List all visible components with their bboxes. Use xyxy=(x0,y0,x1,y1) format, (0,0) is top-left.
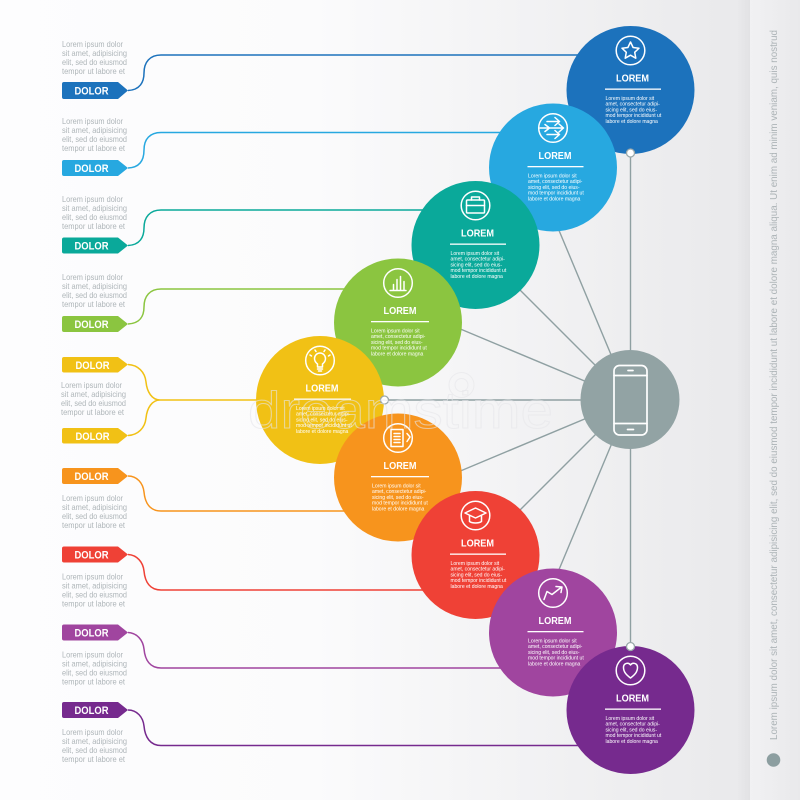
item 8 left label: elit, sed do eiusmod xyxy=(62,668,127,678)
circle 4: green: Lorem ipsum dolor sit xyxy=(371,328,420,334)
circle 1: dark blue: sicing elit, sed do eius- xyxy=(606,107,657,113)
item 6 left label: tempor ut labore et xyxy=(62,521,126,530)
icon: trend arrow xyxy=(539,579,567,607)
circle 8: light purple: amet, consectetur adipi- xyxy=(528,644,583,650)
circle 5: yellow: Lorem ipsum dolor sit xyxy=(296,406,345,412)
item 2 left label: elit, sed do eiusmod xyxy=(62,135,127,144)
circle 7: red: Lorem ipsum dolor sit xyxy=(450,561,500,567)
circle 4: green: sicing elit, sed do eius- xyxy=(371,340,423,346)
circle 7: red: sicing elit, sed do eius- xyxy=(450,572,502,578)
item 9 left label: Lorem ipsum dolor xyxy=(62,728,123,737)
connector 5 (double) xyxy=(128,364,280,436)
circle 3: teal: amet, consectetur adipi- xyxy=(450,257,505,263)
item 3 left label: sit amet, adipisicing xyxy=(62,204,127,213)
item 6 left label: DOLOR xyxy=(74,471,109,483)
circle 2: light blue: Lorem ipsum dolor sit xyxy=(528,173,577,179)
item 1 left label: tempor ut labore et xyxy=(62,67,126,76)
item 2 left label: Lorem ipsum dolor xyxy=(62,117,123,126)
item 2 left label: DOLOR xyxy=(74,163,109,175)
connector 3 xyxy=(128,210,440,246)
icon: smartphone xyxy=(614,366,647,435)
circle 8: light purple xyxy=(489,568,617,696)
item 3 left label: DOLOR xyxy=(74,240,109,252)
item 1 left label xyxy=(62,40,128,99)
watermark: dreamstime xyxy=(248,382,553,440)
item 2 left label: sit amet, adipisicing xyxy=(62,126,127,135)
circle 1: dark blue: mod tempor incididunt ut xyxy=(606,113,662,119)
circle 5: yellow: labore et dolore magna xyxy=(296,429,349,435)
circle 2: light blue: LOREM xyxy=(538,150,572,162)
connector 9 xyxy=(128,710,600,746)
connector 6 xyxy=(128,476,360,511)
item 5 left label: tempor ut labore et xyxy=(61,408,125,417)
circle 4: green: mod tempor incididunt ut xyxy=(371,346,427,352)
circle 3: teal: Lorem ipsum dolor sit xyxy=(450,251,500,257)
icon: arrows xyxy=(539,114,567,142)
item 9 left label: elit, sed do eiusmod xyxy=(62,746,127,755)
item 9 left label: DOLOR xyxy=(74,705,109,717)
item 7 left label: elit, sed do eiusmod xyxy=(62,590,127,600)
circle 3: teal: sicing elit, sed do eius- xyxy=(450,262,502,268)
item 9 left label xyxy=(62,702,128,764)
icon: document xyxy=(384,424,412,452)
item 2 left label: tempor ut labore et xyxy=(62,144,126,153)
connector 1 xyxy=(128,55,600,90)
item 7 left label: Lorem ipsum dolor xyxy=(62,572,123,582)
icon: light bulb xyxy=(306,346,334,375)
circle 7: red: LOREM xyxy=(461,538,494,550)
side panel dot xyxy=(767,753,780,767)
circle 3: teal: labore et dolore magna xyxy=(450,274,503,280)
circle 8: light purple: mod tempor incididunt ut xyxy=(528,656,584,662)
circle 2: light blue: amet, consectetur adipi- xyxy=(528,179,583,185)
circle 6: orange: amet, consectetur adipi- xyxy=(372,489,427,495)
item 5 left label xyxy=(61,357,128,444)
circle 1: dark blue: LOREM xyxy=(616,72,649,84)
item 2 left label xyxy=(62,117,128,176)
item 6 left label: elit, sed do eiusmod xyxy=(62,512,127,521)
circle 5: yellow xyxy=(256,336,384,464)
circle 9: dark purple: LOREM xyxy=(616,692,649,704)
connector node: top xyxy=(626,149,634,157)
circle 2: light blue: mod tempor incididunt ut xyxy=(528,191,584,197)
item 1 left label: sit amet, adipisicing xyxy=(62,49,127,58)
circle 6: orange xyxy=(334,414,462,542)
circle 8: light purple: sicing elit, sed do eius- xyxy=(528,650,580,656)
circle 4: green: labore et dolore magna xyxy=(371,352,424,358)
connector 2 xyxy=(128,132,520,168)
circle 5: yellow: mod tempor incididunt ut xyxy=(296,423,352,429)
side panel xyxy=(750,0,800,800)
item 4 left label: tempor ut labore et xyxy=(62,300,126,309)
item 7 left label xyxy=(62,546,128,608)
circle 9: dark purple: Lorem ipsum dolor sit xyxy=(606,716,655,722)
circle 2: light blue xyxy=(489,104,617,232)
circle 5: yellow: sicing elit, sed do eius- xyxy=(296,417,348,423)
item 4 left label: Lorem ipsum dolor xyxy=(62,273,123,282)
circle 3: teal: LOREM xyxy=(461,228,494,240)
circle 1: dark blue: Lorem ipsum dolor sit xyxy=(606,96,655,102)
item 5 left label: Lorem ipsum dolor xyxy=(61,381,122,390)
item 4 left label: DOLOR xyxy=(74,319,109,331)
connector 8 xyxy=(128,632,520,668)
circle 4: green: amet, consectetur adipi- xyxy=(371,334,426,340)
item 5 left label: elit, sed do eiusmod xyxy=(61,399,126,408)
icon: briefcase xyxy=(461,191,490,220)
circle 1: dark blue xyxy=(566,26,694,154)
circle 2: light blue: sicing elit, sed do eius- xyxy=(528,185,580,191)
circle 7: red: mod tempor incididunt ut xyxy=(450,578,507,584)
circle 9: dark purple: amet, consectetur adipi- xyxy=(606,722,660,728)
icon: heart xyxy=(616,656,645,685)
item 3 left label xyxy=(62,195,128,254)
item 9 left label: sit amet, adipisicing xyxy=(62,737,127,746)
item 8 left label: DOLOR xyxy=(74,628,109,640)
item 1 left label: elit, sed do eiusmod xyxy=(62,58,127,67)
item 1 left label: DOLOR xyxy=(74,86,109,98)
circle 9: dark purple: labore et dolore magna xyxy=(606,739,658,745)
circle 6: orange: labore et dolore magna xyxy=(372,506,425,512)
circle 6: orange: LOREM xyxy=(384,460,417,472)
circle 3: teal: mod tempor incididunt ut xyxy=(450,268,507,274)
circle 4: green xyxy=(334,258,462,386)
item 7 left label: sit amet, adipisicing xyxy=(62,582,127,590)
item 3 left label: Lorem ipsum dolor xyxy=(62,195,123,204)
connector node: bottom xyxy=(626,642,634,650)
circle 6: orange: mod tempor incididunt ut xyxy=(372,501,428,507)
circle 6: orange: sicing elit, sed do eius- xyxy=(372,495,424,501)
icon: graduation cap xyxy=(461,501,490,530)
connector 4 xyxy=(128,289,360,324)
circle 5: yellow: amet, consectetur adipi- xyxy=(296,412,351,418)
item 7 left label: DOLOR xyxy=(74,550,109,562)
hub spokes xyxy=(384,153,630,646)
item 6 left label: Lorem ipsum dolor xyxy=(62,494,123,503)
item 8 left label xyxy=(62,624,128,686)
circle 1: dark blue: labore et dolore magna xyxy=(606,119,658,125)
connector node: middle xyxy=(380,396,388,404)
item 3 left label: elit, sed do eiusmod xyxy=(62,213,127,222)
item 1 left label: Lorem ipsum dolor xyxy=(62,40,123,49)
circle 7: red xyxy=(412,491,540,619)
item 3 left label: tempor ut labore et xyxy=(62,222,126,231)
circle 6: orange: Lorem ipsum dolor sit xyxy=(372,483,421,489)
circle 8: light purple: LOREM xyxy=(538,615,572,627)
item 4 left label: elit, sed do eiusmod xyxy=(62,291,127,300)
circle 9: dark purple: sicing elit, sed do eius- xyxy=(606,727,657,733)
item 4 left label: sit amet, adipisicing xyxy=(62,282,127,291)
item 5 left label: DOLOR xyxy=(76,431,110,443)
item 8 left label: sit amet, adipisicing xyxy=(62,660,127,668)
item 5 left label: DOLOR xyxy=(76,360,110,372)
side panel vertical text: Lorem ipsum dolor sit amet, consectetur adipisicing elit, sed do eiusmod tempor incididunt ut labore et dolore magna aliqua. Ut enim ad minim veniam, quis nostrud xyxy=(768,30,780,740)
icon: star xyxy=(616,36,645,65)
icon: bar chart xyxy=(384,269,412,297)
item 5 left label: sit amet, adipisicing xyxy=(61,390,126,399)
item 6 left label: sit amet, adipisicing xyxy=(62,503,127,512)
item 4 left label xyxy=(62,273,128,332)
item 8 left label: tempor ut labore et xyxy=(62,678,126,686)
circle 7: red: amet, consectetur adipi- xyxy=(450,567,505,573)
item 9 left label: tempor ut labore et xyxy=(62,755,126,764)
circle 5: yellow: LOREM xyxy=(306,382,339,394)
circle 3: teal xyxy=(412,181,540,309)
circle 9: dark purple xyxy=(566,646,694,774)
circle 2: light blue: labore et dolore magna xyxy=(528,196,581,202)
circle 9: dark purple: mod tempor incididunt ut xyxy=(606,733,662,739)
circle 7: red: labore et dolore magna xyxy=(450,584,503,590)
connector 7 xyxy=(128,554,440,590)
item 6 left label xyxy=(62,468,128,530)
circle 1: dark blue: amet, consectetur adipi- xyxy=(606,102,660,108)
item 7 left label: tempor ut labore et xyxy=(62,600,126,608)
central hub: phone xyxy=(580,350,680,449)
circle 4: green: LOREM xyxy=(384,305,417,317)
circle 8: light purple: Lorem ipsum dolor sit xyxy=(528,638,577,644)
circle 8: light purple: labore et dolore magna xyxy=(528,662,581,668)
item 8 left label: Lorem ipsum dolor xyxy=(62,650,123,660)
